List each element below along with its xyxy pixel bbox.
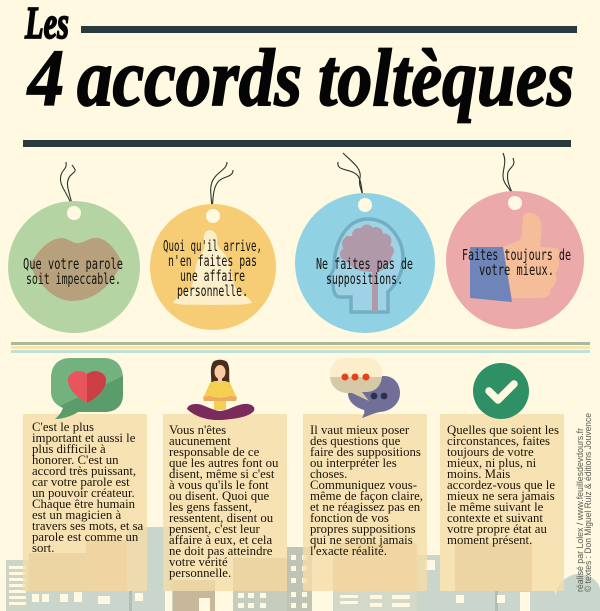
tag 1: parole (8, 162, 140, 333)
tag text 1 (23, 255, 123, 288)
text block 3: choses. (310, 467, 347, 481)
tag text 3: suppositions. (326, 270, 403, 288)
text block 2: Vous n'êtes (169, 423, 226, 437)
tag text 2: une affaire (180, 267, 245, 285)
text block 4: votre propre état au (447, 522, 547, 536)
text block 3: et ne réagissez pas en (310, 500, 421, 514)
skyline background (6, 527, 600, 611)
tag 4: mieux (446, 153, 584, 329)
text block 1: sort. (32, 541, 54, 555)
text block 4: contexte et suivant (447, 511, 543, 525)
text block 1: plus difficile à (32, 442, 106, 456)
text block 1: honorer. C'est un (32, 453, 119, 467)
icon: meditating woman (187, 360, 254, 420)
panel 3 (303, 358, 427, 591)
text block 3: même de façon claire, (310, 489, 423, 503)
icon: speech bubble with heart (51, 358, 123, 419)
text block 4: moins. Mais (447, 467, 510, 481)
title word: accords: accords (77, 32, 302, 123)
text block 2: pensent, c'est leur (169, 522, 261, 536)
text block 3: propres suppositions (310, 522, 416, 536)
icon: two speech bubbles (330, 358, 400, 418)
text block 1: C'est le plus (32, 420, 94, 434)
text block 1: important et aussi le (32, 431, 136, 445)
text block 2: ressentent, disent ou (169, 511, 274, 525)
icon: thumbs up (470, 213, 559, 302)
text block 4: moment présent. (447, 533, 532, 547)
credits (575, 413, 594, 592)
text block 3: ou interpréter les (310, 456, 397, 470)
icon: check mark (473, 363, 529, 419)
text block 2: personnelle. (169, 566, 231, 580)
text block 3: qui ne seront jamais (310, 533, 413, 547)
text block 4: le même suivant le (447, 500, 544, 514)
tag text 4: votre mieux. (479, 261, 554, 279)
panel 4 (440, 363, 564, 591)
text block 4: circonstances, faites (447, 434, 550, 448)
panel 2 (163, 360, 287, 591)
icon: head with brain (329, 219, 403, 312)
title (24, 0, 574, 123)
icon: lips (30, 238, 122, 301)
text block 4: mieux, ni plus, ni (447, 456, 537, 470)
text block 3: des questions que (310, 434, 401, 448)
text block 2: affaire à eux, et cela (169, 533, 272, 547)
panel 1 (23, 358, 147, 591)
text block 2: à vous qu'ils le font (169, 478, 269, 492)
text block 2: disent, même si c'est (169, 467, 275, 481)
text block 2: aucunement (169, 434, 231, 448)
text block 1: car votre parole est (32, 475, 130, 489)
text block 1: un pouvoir créateur. (32, 486, 135, 500)
text block 3: fonction de vos (310, 511, 389, 525)
icon: meditating silhouette (173, 230, 252, 305)
text block 4: Quelles que soient les (447, 423, 559, 437)
text block 2: ou disent. Quoi que (169, 489, 270, 503)
text block 3: faire des suppositions (310, 445, 421, 459)
text block 2: les gens fassent, (169, 500, 252, 514)
tag 2: personnelle (150, 162, 276, 330)
tag text 1: soit impeccable. (26, 270, 121, 288)
text block 1: parole est comme un (32, 530, 139, 544)
text block 2: votre vérité (169, 555, 228, 569)
title number: 4: 4 (26, 35, 64, 123)
text block 2: que les autres font ou (169, 456, 279, 470)
tag 3: suppositions (295, 153, 435, 333)
tag text 1: Que votre parole (23, 255, 123, 273)
text block 2: ne doit pas atteindre (169, 544, 273, 558)
text block 1: travers ses mots, et sa (32, 519, 144, 533)
tag text 2 (163, 237, 262, 300)
text block 1: accord très puissant, (32, 464, 136, 478)
tag text 2: Quoi qu'il arrive, (163, 237, 262, 255)
tag text 4 (462, 246, 571, 279)
text block 3: l'exacte réalité. (310, 544, 387, 558)
text block 4: accordez-vous que le (447, 478, 555, 492)
text block 4: toujours de votre (447, 445, 534, 459)
text block 4: mieux ne sera jamais (447, 489, 555, 503)
text block 3: Il vaut mieux poser (310, 423, 410, 437)
credits: réalisé par Lolex / www.feuillesdevdours.fr (575, 428, 586, 592)
text block 3: Communiquez vous- (310, 478, 417, 492)
tag text 3 (316, 255, 413, 288)
tag text 3: Ne faites pas de (316, 255, 413, 273)
text block 2: responsable de ce (169, 445, 260, 459)
tag text 2: n'en faites pas (168, 252, 257, 270)
text block 1: est un magicien à (32, 508, 122, 522)
credits: © textes : Don Miguel Ruiz & éditions Jouvence (583, 413, 594, 592)
text block 1: Chaque être humain (32, 497, 136, 511)
tag text 2: personnelle. (177, 282, 248, 300)
